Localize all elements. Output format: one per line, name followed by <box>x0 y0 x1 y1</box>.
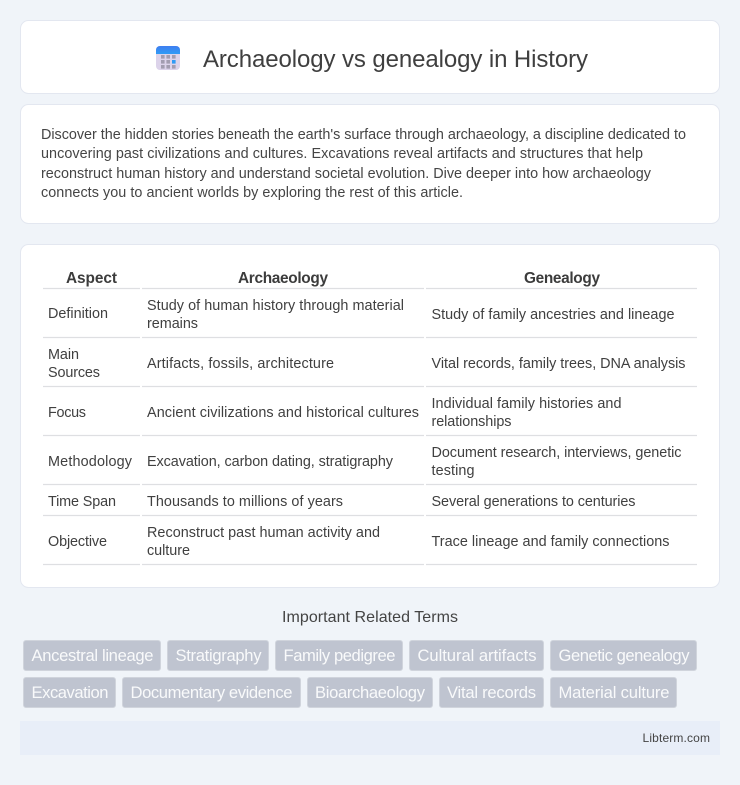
tag: Bioarchaeology <box>315 683 426 702</box>
text block: introduction: connects you to ancient worlds by exploring the rest of this article. <box>41 185 463 201</box>
table header: Aspect <box>66 270 117 287</box>
tag: Stratigraphy <box>176 646 262 665</box>
table row: time span: Time Span <box>48 494 116 510</box>
tag <box>24 678 116 708</box>
footer credit: Libterm.com <box>642 731 710 745</box>
text block: introduction <box>41 127 686 201</box>
tag <box>440 678 544 708</box>
text block: introduction: uncovering past civilizations and cultures. Excavations reveal artifacts and structures that help <box>41 146 643 162</box>
footer <box>20 721 720 755</box>
table row: objective: Trace lineage and family connections <box>432 534 670 550</box>
tag <box>24 640 160 670</box>
table row: objective: Objective <box>48 534 107 550</box>
table row: focus: Focus <box>48 405 86 421</box>
table row: definition: Definition <box>48 306 108 322</box>
table row: objective: Reconstruct past human activity and <box>147 525 380 541</box>
panel: header <box>20 20 720 94</box>
table row: time span: Thousands to millions of years <box>147 494 343 510</box>
table row: methodology <box>48 445 682 479</box>
tag: Excavation <box>32 683 108 702</box>
tag <box>410 640 544 670</box>
tag <box>168 640 268 670</box>
tag: Vital records <box>447 683 536 702</box>
table row: definition: Study of family ancestries and lineage <box>432 307 674 323</box>
table header <box>66 270 600 287</box>
panel: introduction <box>20 104 720 224</box>
panel: comparison table <box>20 244 720 588</box>
table row: definition <box>48 298 674 332</box>
table header: Genealogy <box>524 270 600 287</box>
table row: methodology: Methodology <box>48 454 133 470</box>
table row: definition: Study of human history through material <box>147 298 404 314</box>
tag: Genetic genealogy <box>558 646 690 665</box>
table row: methodology: Document research, interviews, genetic <box>432 445 682 461</box>
table row: methodology: testing <box>432 463 474 479</box>
tag: Family pedigree <box>284 646 396 665</box>
tag <box>550 640 696 670</box>
table row: objective <box>48 525 670 559</box>
tag: Documentary evidence <box>130 683 292 702</box>
table row: main sources <box>48 347 686 381</box>
text block: introduction: Discover the hidden stories beneath the earth's surface through archaeology, a discipline dedicated to <box>41 127 686 143</box>
table row: focus <box>48 396 622 430</box>
table row: definition: remains <box>147 316 198 332</box>
table row: main sources: Artifacts, fossils, architecture <box>147 356 334 372</box>
tag <box>122 678 300 708</box>
tag <box>308 678 432 708</box>
table row: main sources: Main <box>48 347 79 363</box>
tag: Ancestral lineage <box>32 646 154 665</box>
text block: introduction: reconstruct human history and understand societal evolution. Dive deeper into how archaeology <box>41 166 652 182</box>
table row: objective: culture <box>147 543 190 559</box>
tags: related terms <box>24 640 696 708</box>
tag <box>550 678 676 708</box>
heading: related terms: Important Related Terms <box>282 609 458 626</box>
table row: focus: Individual family histories and <box>432 396 622 412</box>
table row: time span <box>48 494 636 510</box>
table row: focus: Ancient civilizations and historical cultures <box>147 405 419 421</box>
icon: calendar <box>156 46 180 70</box>
table row: focus: relationships <box>432 414 512 430</box>
table row: main sources: Vital records, family trees, DNA analysis <box>432 356 686 372</box>
tag <box>276 640 402 670</box>
tag: Cultural artifacts <box>418 646 536 665</box>
table header: Archaeology <box>238 270 328 287</box>
tag: Material culture <box>558 683 670 702</box>
table row: main sources: Sources <box>48 365 100 381</box>
table row: methodology: Excavation, carbon dating, stratigraphy <box>147 454 394 470</box>
table row: time span: Several generations to centuries <box>432 494 636 510</box>
title: Archaeology vs genealogy in History <box>203 46 588 73</box>
